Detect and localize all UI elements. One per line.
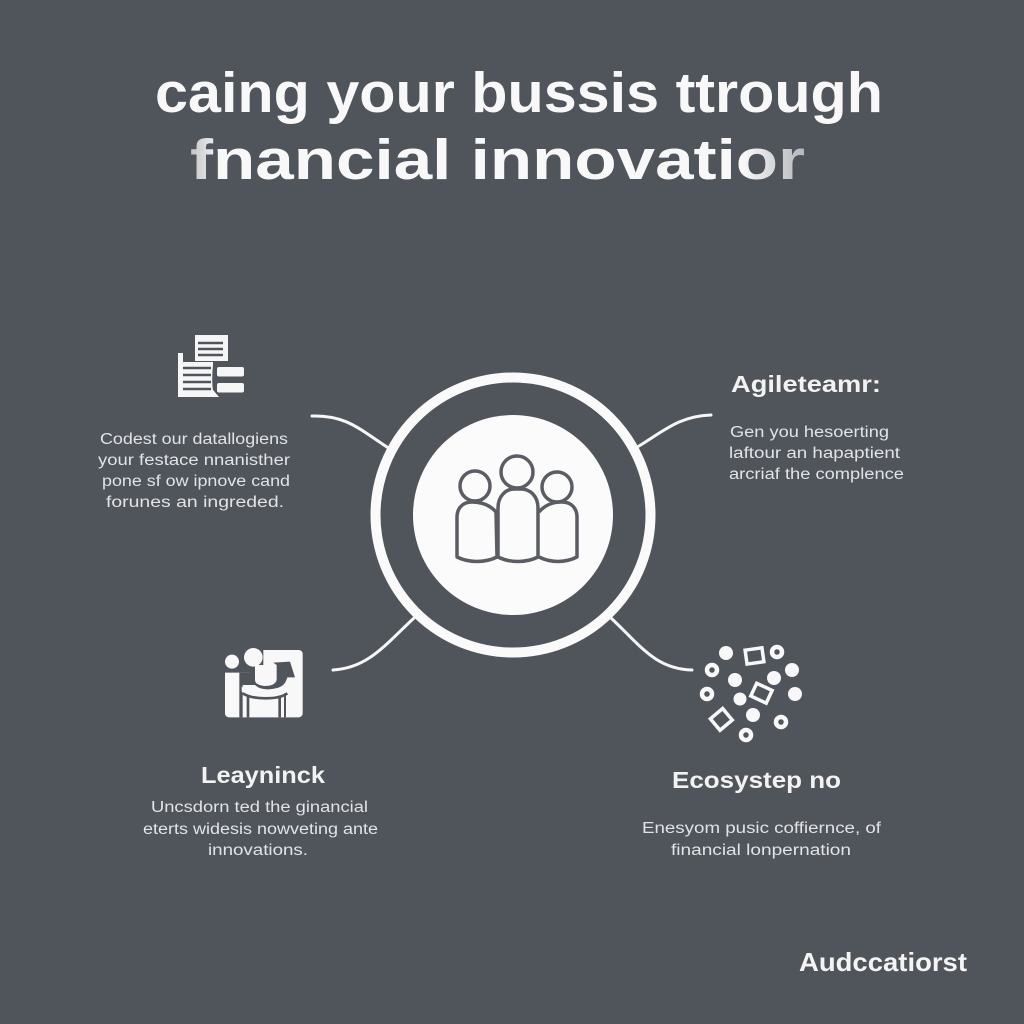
title: fnancial innovatior: [190, 128, 805, 192]
text block: top left: your festace nnanisther: [98, 452, 290, 469]
text block: top left: forunes an ingreded.: [106, 494, 284, 511]
icon: documents: [178, 335, 244, 397]
heading: Agile team: Agileteamr:: [731, 371, 881, 397]
text block: Leayninck: innovations.: [208, 842, 308, 859]
text block: Ecosystep: [642, 767, 882, 859]
title: caing your bussis ttrough: [155, 61, 883, 125]
text block: Agile team: [729, 371, 904, 483]
outer ring: [376, 378, 650, 652]
text block: Agile team: Gen you hesoerting: [730, 424, 889, 441]
central hub: [376, 378, 650, 652]
text block: Leayninck: Uncsdorn ted the ginancial: [151, 799, 368, 816]
text block: Agile team: arcriaf the complence: [729, 466, 904, 483]
text block: Ecosystep: financial lonpernation: [671, 842, 851, 859]
icon: ecosystem dots: [702, 646, 802, 740]
text block: Agile team: laftour an hapaptient: [729, 445, 901, 462]
text block: top left: [98, 431, 290, 511]
inner disc: [413, 415, 613, 615]
brand wordmark: Audccatiorst: [799, 947, 967, 977]
title: [155, 61, 883, 192]
text block: Leayninck: [143, 762, 378, 859]
text block: top left: Codest our datallogiens: [100, 431, 288, 448]
text block: top left: pone sf ow ipnove cand: [102, 473, 290, 490]
connector lines: [312, 415, 711, 670]
icon: team of three people: [457, 456, 577, 562]
heading: Ecosystep no: Ecosystep no: [672, 767, 841, 793]
heading: Leayninck: Leayninck: [201, 762, 325, 788]
text block: Leayninck: eterts widesis nowveting ante: [143, 821, 378, 838]
text block: Ecosystep: Enesyom pusic coffiernce, of: [642, 820, 882, 837]
icon: person at desk: [223, 648, 303, 717]
